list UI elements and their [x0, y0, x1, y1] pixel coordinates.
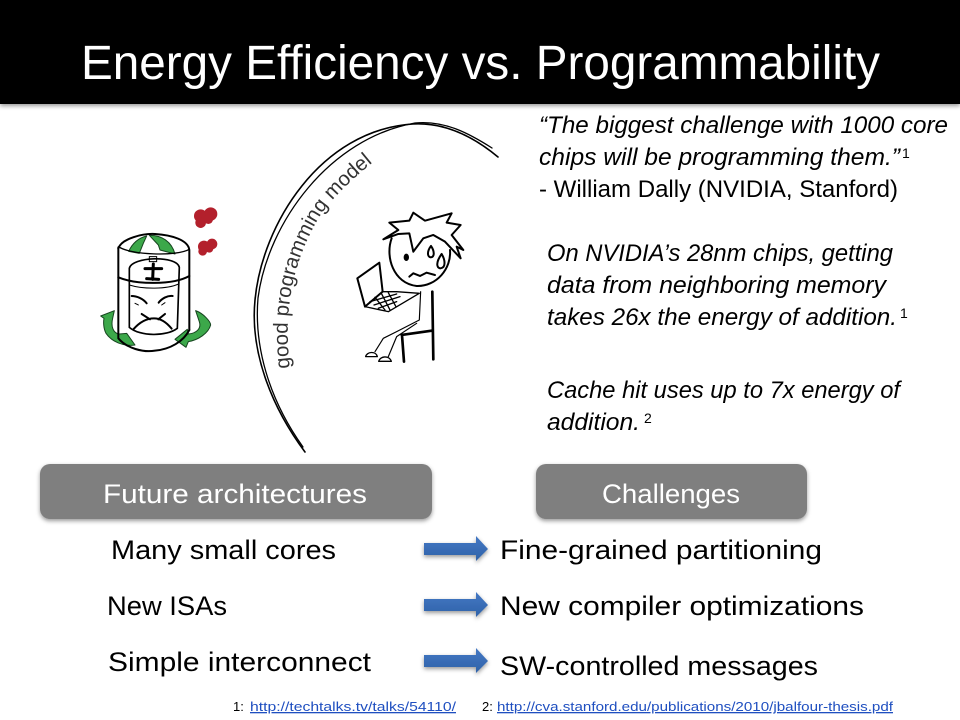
row 3: Simple interconnect	[108, 647, 372, 677]
row 1	[111, 535, 822, 565]
text block: cache energy: addition.	[547, 409, 640, 436]
eye and tears	[404, 254, 409, 261]
footnotes	[233, 699, 893, 714]
body and legs	[375, 292, 421, 357]
footnotes: 1:	[233, 699, 244, 714]
text block: memory energy: On NVIDIA’s 28nm chips, getting	[547, 240, 894, 267]
row 1: Many small cores	[111, 535, 336, 565]
laptop	[357, 263, 383, 307]
icon: battery body	[118, 234, 189, 351]
arc label text: good programming model	[272, 152, 372, 368]
row 2: New compiler optimizations	[500, 591, 864, 621]
icon: angry battery with recycling arrows	[101, 207, 217, 351]
row 2: New ISAs	[107, 591, 227, 621]
icon: green arrows	[101, 235, 211, 347]
footnotes: http://cva.stanford.edu/publications/2010/jbalfour-thesis.pdf	[497, 699, 893, 714]
row 2	[107, 591, 864, 621]
button: challenges: Challenges	[602, 479, 740, 509]
row 3	[108, 647, 818, 681]
row 3: SW-controlled messages	[500, 651, 818, 681]
title: Energy Efficiency vs. Programmability	[81, 37, 880, 90]
quote block: - William Dally (NVIDIA, Stanford)	[539, 176, 898, 203]
quote block	[539, 112, 948, 203]
arrow	[424, 648, 488, 673]
text block: memory energy: takes 26x the energy of addition.	[547, 304, 897, 331]
text block: cache energy: 2	[644, 410, 652, 426]
button: future architectures: Future architectures	[103, 479, 367, 509]
head	[389, 238, 450, 286]
chair	[402, 292, 433, 362]
quote block: 1	[902, 145, 910, 161]
row 1: Fine-grained partitioning	[500, 535, 822, 565]
arrow	[424, 536, 488, 561]
footnotes: http://techtalks.tv/talks/54110/	[250, 699, 456, 714]
quote block: chips will be programming them.”	[539, 144, 901, 171]
arc: good programming model	[254, 123, 498, 452]
button: future architectures	[40, 464, 432, 519]
footnotes: 2:	[482, 699, 493, 714]
text block: memory energy: data from neighboring memory	[547, 272, 888, 299]
feet	[366, 353, 391, 361]
mouth	[409, 273, 435, 277]
icon: worried programmer with laptop	[357, 213, 463, 362]
quote block: “The biggest challenge with 1000 core	[539, 112, 948, 139]
text block: cache energy	[547, 377, 902, 436]
arrow	[424, 592, 488, 617]
title banner	[0, 0, 960, 104]
text block: memory energy: 1	[900, 305, 908, 321]
hair	[383, 213, 463, 258]
icon: red sparks	[194, 207, 217, 256]
text block: memory energy	[547, 240, 908, 331]
button: challenges	[536, 464, 807, 519]
text block: cache energy: Cache hit uses up to 7x energy of	[547, 377, 902, 404]
